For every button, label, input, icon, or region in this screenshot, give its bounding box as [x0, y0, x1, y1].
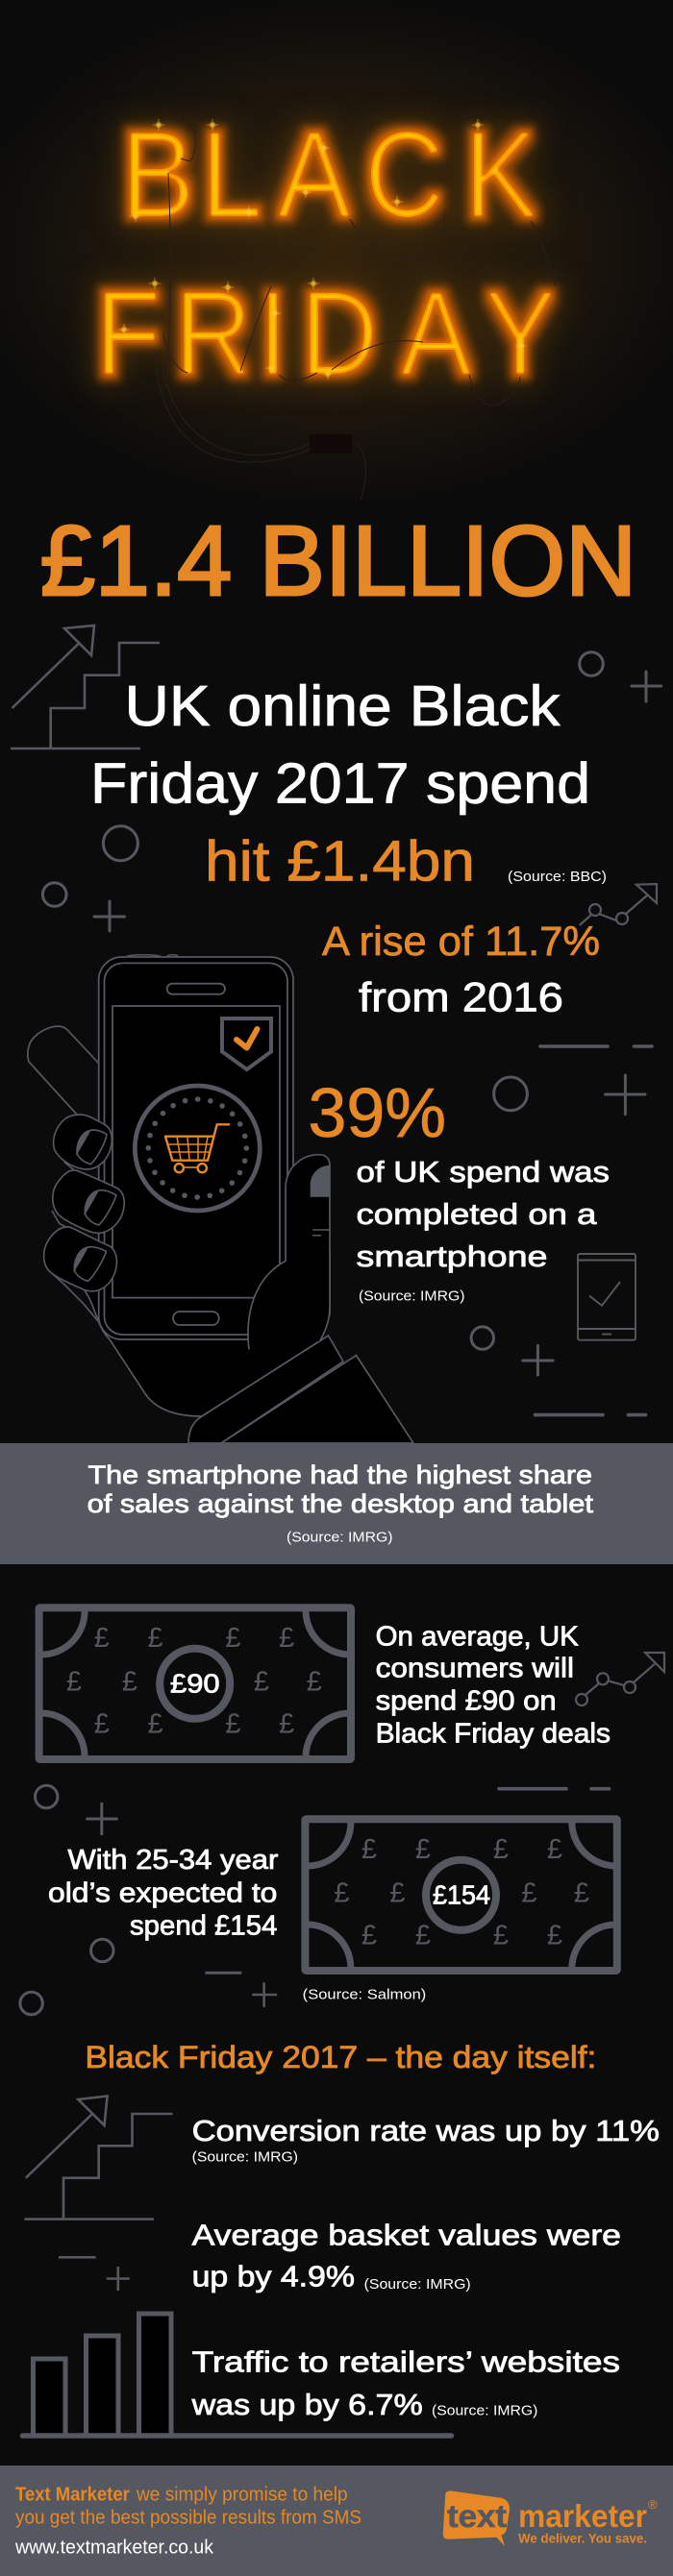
stat: retailer website traffic: was up by 6.7%: [191, 2388, 423, 2421]
text: a rise of 11.7% from 2016: from 2016: [359, 975, 563, 1021]
banknote: £154: £: [334, 1877, 350, 1908]
text: average consumer spend: spend £90 on: [376, 1685, 557, 1716]
text: average consumer spend: consumers will: [376, 1654, 574, 1684]
banknote: £154: £: [361, 1834, 377, 1865]
footer text: you get the best possible results from SMS: [15, 2508, 361, 2529]
banknote: £90: £: [148, 1623, 163, 1654]
banknote: £154: £: [415, 1920, 431, 1950]
decorative dash and plus: [59, 2257, 130, 2291]
footer text: www.textmarketer.co.uk: [14, 2537, 214, 2558]
text: 25-34 year olds: old’s expected to: [48, 1877, 277, 1908]
stat: conversion rate: [192, 2114, 660, 2165]
neon title: BLACK FRIDAY: FRIDAY: [95, 267, 557, 401]
neon glow background: [0, 0, 673, 519]
banknote: £154: £: [547, 1834, 562, 1865]
stat: conversion rate: Conversion rate was up by 11%: [192, 2114, 660, 2147]
text: a rise of 11.7% from 2016: [322, 919, 600, 1021]
stat: 39% of UK spend: completed on a: [356, 1197, 597, 1231]
footer text: [14, 2485, 361, 2558]
icon: shopping cart in dotted circle: [135, 1086, 260, 1211]
banknote: £154: £: [493, 1834, 509, 1865]
banknote: £90: £: [279, 1708, 294, 1739]
phone body: [99, 955, 293, 1339]
banknote: £154: £: [547, 1920, 562, 1950]
banknote: £90: £: [122, 1666, 137, 1697]
logo: text marketer: We deliver. You save.: [518, 2531, 647, 2546]
banknote: £90: £90: [170, 1669, 220, 1699]
banknote: £154: £: [521, 1877, 537, 1908]
grey band: smartphone share of sales: (Source: IMRG): [287, 1530, 392, 1545]
text: average consumer spend: On average, UK: [376, 1622, 579, 1653]
footer text: we simply promise to help: [136, 2485, 348, 2506]
heading: UK online Black Friday 2017 spend: [90, 675, 590, 816]
decorative circle and plus, top right: [580, 652, 661, 701]
stat: 39% of UK spend: [308, 1075, 610, 1305]
stat: 39% of UK spend: 39%: [308, 1075, 446, 1152]
thumb: [248, 1155, 330, 1349]
icon: trend line with arrow: [580, 884, 657, 925]
text: 25-34 year olds: spend £154: [130, 1910, 277, 1941]
decorative circles and plus, left: [42, 826, 137, 931]
banknote: £90: £: [254, 1666, 269, 1697]
heading: hit £1.4bn with source: hit £1.4bn: [205, 830, 475, 894]
headline: £1.4 BILLION: £1.4 BILLION: [40, 505, 636, 616]
neon sparkles: [118, 119, 527, 380]
decorative circles, dash and plus: [20, 1939, 276, 2015]
banknote: £154: £: [361, 1920, 377, 1950]
heading: hit £1.4bn with source: [205, 830, 607, 894]
banknote: £90: £: [279, 1623, 294, 1654]
footer band: [0, 2466, 673, 2576]
palm and sleeve: [58, 1249, 413, 1443]
text: 25-34 year olds: With 25-34 year: [67, 1845, 279, 1876]
stat: 39% of UK spend: (Source: IMRG): [359, 1289, 465, 1305]
stat: average basket values: (Source: IMRG): [364, 2277, 471, 2293]
icon: bar chart: [23, 2314, 452, 2436]
stat: average basket values: [192, 2218, 621, 2294]
banknote: £154: [305, 1819, 617, 1971]
heading: UK online Black Friday 2017 spend: UK online Black: [125, 675, 561, 738]
text: average consumer spend: [376, 1622, 611, 1749]
banknote: £90: [39, 1607, 351, 1759]
stat: 39% of UK spend: smartphone: [356, 1239, 548, 1273]
stat: retailer website traffic: Traffic to retailers’ websites: [192, 2344, 620, 2379]
logo: text marketer: ®: [648, 2497, 658, 2512]
logo: text marketer: [443, 2490, 658, 2546]
banknote: £90: £: [307, 1666, 322, 1697]
neon title: BLACK FRIDAY: [95, 106, 557, 401]
banknote: £90: £: [94, 1623, 110, 1654]
neon sign wires and transformer: [154, 115, 556, 500]
grey band: smartphone share of sales: The smartphone had the highest share: [88, 1460, 592, 1489]
text: average consumer spend: Black Friday deals: [376, 1718, 611, 1749]
banknote: £154: £: [574, 1877, 589, 1908]
index finger: [28, 1026, 99, 1115]
heading: UK online Black Friday 2017 spend: Friday 2017 spend: [90, 752, 590, 816]
banknote: £90: £: [225, 1708, 240, 1739]
banknote: £90: £: [94, 1708, 110, 1739]
banknote: £154: £: [415, 1834, 431, 1865]
icon: trend line with arrow: [576, 1653, 664, 1705]
banknote: £154: £154: [433, 1880, 490, 1910]
illustration: hand holding smartphone: [28, 955, 413, 1443]
decorative dashes, circle and plus: [35, 1785, 610, 1834]
source: Salmon: (Source: Salmon): [303, 1988, 426, 2003]
fingers with nails: [44, 1115, 124, 1323]
banknote: £90: £: [66, 1666, 82, 1697]
text: a rise of 11.7% from 2016: A rise of 11.7%: [322, 919, 600, 965]
heading: the day itself: Black Friday 2017 – the day itself:: [85, 2040, 596, 2074]
logo: text marketer: text: [447, 2498, 507, 2534]
icon: rising stairs with arrow: [11, 626, 160, 748]
stat: conversion rate: (Source: IMRG): [192, 2149, 298, 2165]
stat: retailer website traffic: (Source: IMRG): [432, 2404, 537, 2419]
footer text: Text Marketer: [15, 2485, 130, 2506]
decorative circle, plus and dashes: [471, 1327, 646, 1415]
banknote: £154: £: [389, 1877, 406, 1908]
banknote: £90: £: [148, 1708, 163, 1739]
icon: shield with check: [222, 1018, 271, 1069]
logo: text marketer: marketer: [518, 2498, 647, 2534]
icon: rising stairs with arrow: [24, 2097, 173, 2220]
banknote: £154: £: [493, 1920, 509, 1950]
decorative dashes, circle and plus: [494, 1046, 652, 1115]
banknote: £90: £: [225, 1623, 240, 1654]
grey band: smartphone share of sales: of sales against the desktop and tablet: [87, 1489, 594, 1518]
neon title: BLACK FRIDAY: BLACK: [120, 106, 538, 244]
grey band: smartphone share of sales: [0, 1443, 673, 1564]
icon: small smartphone with tick: [578, 1254, 636, 1340]
stat: 39% of UK spend: of UK spend was: [356, 1155, 610, 1189]
stat: average basket values: Average basket values were: [192, 2218, 621, 2251]
text: 25-34 year olds: [48, 1845, 279, 1941]
stat: average basket values: up by 4.9%: [192, 2260, 355, 2294]
stat: retailer website traffic: [191, 2344, 620, 2421]
heading: hit £1.4bn with source: (Source: BBC): [508, 870, 607, 885]
